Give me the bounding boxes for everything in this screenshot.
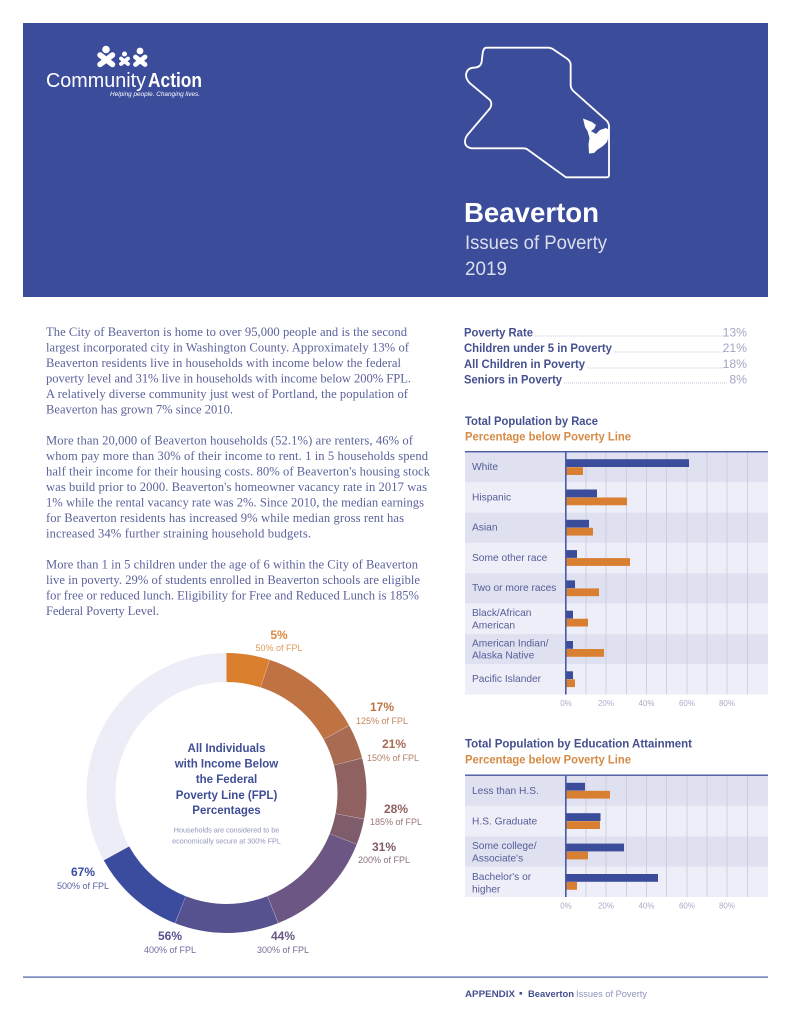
axis labels: 40% [638, 699, 655, 708]
donut label: 28%: 185% of FPL [370, 817, 422, 827]
donut centre note: Households are considered to be [174, 826, 279, 834]
footer: APPENDIX [465, 989, 515, 999]
row labels: Bachelor's or [472, 872, 532, 883]
axis labels: 0% [560, 902, 572, 910]
donut label: 17% [356, 700, 408, 726]
donut label: 44%: 44% [271, 929, 295, 943]
row labels: American Indian/ [472, 638, 549, 649]
intro body text: Federal Poverty Level. [46, 604, 159, 618]
intro body text: half their income for their housing costs. 80% of Beaverton's housing stock [46, 464, 431, 478]
donut label: 21%: 150% of FPL [367, 753, 419, 763]
donut label: 21% [367, 737, 419, 763]
row labels: higher [472, 884, 501, 896]
poverty statistics list: Poverty Rate [464, 326, 533, 340]
donut label: 21%: 21% [382, 737, 406, 751]
intro body text: live in poverty. 29% of students enrolled in Beaverton schools are eligible [46, 573, 420, 587]
donut label: 56% [144, 929, 196, 955]
poverty statistics list: 21% [723, 341, 747, 355]
bars [566, 783, 658, 890]
map: Washington County outline with Beaverton highlighted [465, 48, 609, 177]
donut label: 5%: 50% of FPL [255, 643, 303, 653]
logo wordmark: Community [46, 70, 146, 92]
intro body text: increased 34% further straining household budgets. [46, 526, 311, 540]
row labels: White [472, 462, 498, 473]
logo: Community Action: Action [148, 70, 202, 92]
donut label: 67%: 67% [71, 865, 95, 879]
heading: education chart: Percentage below Poverty Line [465, 752, 631, 766]
donut centre heading [174, 743, 278, 817]
poverty statistics list: 8% [729, 372, 747, 386]
poverty statistics list: 18% [723, 357, 747, 371]
donut label: 17%: 125% of FPL [356, 716, 408, 726]
bar chart: population by race [465, 451, 768, 708]
logo: Community Action [46, 46, 202, 98]
poverty statistics list [464, 326, 747, 386]
donut label: 44%: 300% of FPL [257, 945, 309, 955]
poverty statistics list: Children under 5 in Poverty [464, 341, 612, 355]
donut label: 67%: 500% of FPL [57, 881, 109, 891]
row labels: Associate's [472, 853, 523, 864]
intro body text: Beaverton residents live in households with income below the federal [46, 356, 402, 370]
intro body text: More than 1 in 5 children under the age of 6 within the City of Beaverton [46, 558, 419, 572]
row labels: American [472, 620, 515, 631]
intro body text: was build prior to 2000. Beaverton's homeowner vacancy rate in 2017 was [46, 480, 427, 494]
logo tagline: Helping people. Changing lives. [110, 91, 200, 98]
poverty statistics list: Seniors in Poverty [464, 372, 562, 386]
intro body text: largest incorporated city in Washington County. Approximately 13% of [46, 340, 410, 354]
intro body text: More than 20,000 of Beaverton households (52.1%) are renters, 46% of [46, 434, 414, 448]
row labels: Two or more races [472, 583, 556, 594]
heading: race chart: Percentage below Poverty Line [465, 430, 631, 444]
row labels: Some college/ [472, 841, 537, 852]
header banner [23, 23, 768, 297]
donut centre heading: Percentages [192, 805, 261, 817]
intro body text: whom pay more than 30% of their income to rent. 1 in 5 households spend [46, 449, 429, 463]
title block: Issues of Poverty [465, 233, 607, 254]
bars [566, 459, 689, 687]
intro body text: The City of Beaverton is home to over 95,000 people and is the second [46, 325, 408, 339]
intro body text: for free or reduced lunch. Eligibility for Free and Reduced Lunch is 185% [46, 588, 420, 602]
donut label: 56%: 56% [158, 929, 182, 943]
donut label: 5% [255, 628, 303, 653]
donut centre heading: Poverty Line (FPL) [176, 790, 277, 802]
title block [464, 197, 607, 280]
axis labels: 0% [560, 699, 572, 708]
intro body text: 1% while the rental vacancy rate was 2%. Since 2010, the median earnings [46, 496, 424, 510]
heading: education chart [465, 736, 692, 766]
axis labels: 20% [598, 902, 614, 910]
heading: race chart: Total Population by Race [465, 414, 598, 428]
donut centre note [172, 826, 281, 846]
donut label: 28%: 28% [384, 802, 408, 816]
axis labels: 60% [679, 699, 695, 708]
donut label: 44% [257, 929, 309, 955]
donut label: 31%: 31% [372, 840, 396, 854]
icon: three people [100, 46, 145, 64]
row labels: Alaska Native [472, 651, 535, 662]
row labels: Hispanic [472, 492, 511, 503]
row labels [472, 462, 556, 685]
donut centre heading: the Federal [196, 774, 257, 786]
axis labels [560, 902, 735, 910]
footer: Issues of Poverty [576, 989, 648, 999]
row labels: Pacific Islander [472, 674, 542, 685]
footer [465, 989, 648, 999]
donut chart: income below FPL [101, 668, 352, 918]
poverty statistics list: All Children in Poverty [464, 357, 585, 371]
row labels: Black/African [472, 608, 531, 619]
donut centre note: economically secure at 300% FPL [172, 836, 281, 846]
row labels: Less than H.S. [472, 786, 539, 797]
axis labels: 60% [679, 902, 695, 910]
title block: Beaverton [464, 197, 599, 228]
intro body text [46, 325, 431, 618]
title block: 2019 [465, 259, 507, 280]
axis labels: 80% [719, 902, 735, 910]
axis labels [560, 699, 735, 708]
donut label: 5%: 5% [270, 628, 288, 642]
donut label: 17%: 17% [370, 700, 394, 714]
donut centre heading: with Income Below [174, 758, 278, 770]
donut label: 67% [57, 865, 109, 891]
donut label: 31%: 200% of FPL [358, 855, 410, 865]
intro body text: poverty level and 31% live in households with income below 200% FPL. [46, 372, 411, 386]
row labels: Asian [472, 523, 497, 534]
intro body text: A relatively diverse community just west of Portland, the population of [46, 387, 409, 401]
axis labels: 80% [719, 699, 735, 708]
row labels [472, 786, 539, 896]
donut centre heading: All Individuals [188, 743, 265, 755]
intro body text: Beaverton has grown 7% since 2010. [46, 402, 233, 416]
footer: Beaverton [528, 989, 574, 999]
axis labels: 40% [638, 902, 655, 910]
poverty statistics list: 13% [723, 326, 747, 340]
donut label: 31% [358, 840, 410, 865]
donut label: 56%: 400% of FPL [144, 945, 196, 955]
row labels: Some other race [472, 553, 548, 564]
donut label: 28% [370, 802, 422, 827]
bar chart: population by education [465, 774, 768, 910]
row labels: H.S. Graduate [472, 816, 537, 827]
axis labels: 20% [598, 699, 614, 708]
heading: education chart: Total Population by Education Attainment [465, 736, 692, 750]
intro body text: for Beaverton residents has increased 9% while median gross rent has [46, 511, 404, 525]
heading: race chart [465, 414, 631, 444]
